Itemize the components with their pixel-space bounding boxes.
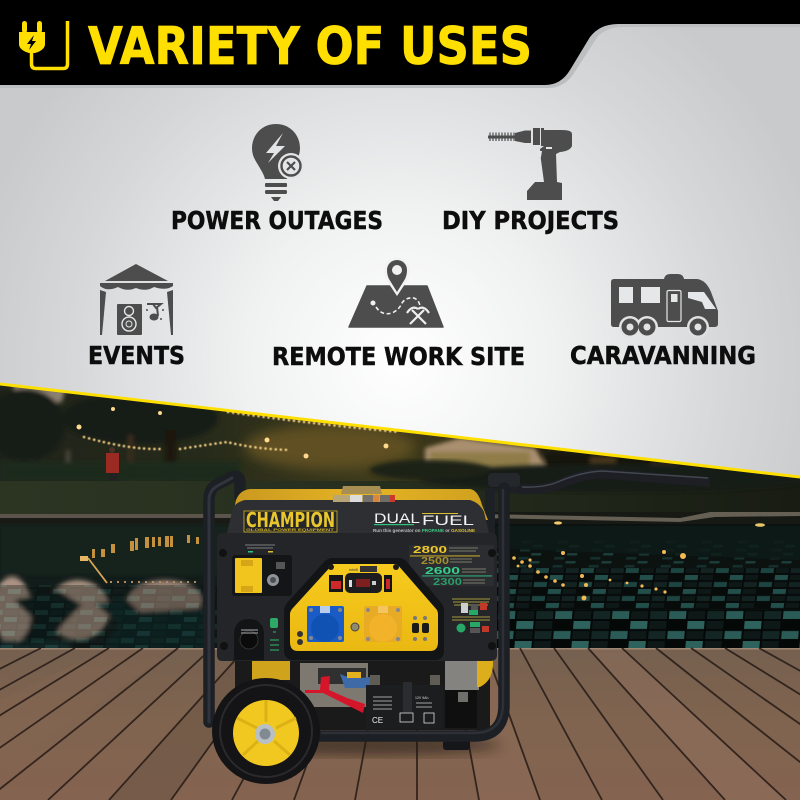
pool water right with tiles [480,521,800,650]
Dual Fuel logo [373,510,475,533]
hood [226,500,490,537]
red tag [305,676,365,713]
fold-out handle [488,471,710,489]
use: DIY projects [442,128,619,235]
output ratings: 2800 [413,545,448,556]
Dual Fuel logo: FUEL [422,512,474,528]
output ratings: 2500 [421,556,450,567]
ground shadow [240,735,500,755]
sticker strip [333,495,395,502]
digital meter [345,573,382,593]
fuel connector [234,618,279,660]
fuel cap [341,486,382,494]
label: POWER OUTAGES [171,206,383,235]
label: CARAVANNING [570,341,756,370]
pool edge [0,512,800,526]
wooden deck [0,648,800,800]
label: EVENTS [88,341,185,370]
battery: CE [372,716,383,725]
person in red [106,453,119,473]
yellow control panel: intelli [349,567,358,572]
wheel [212,678,320,784]
background photo: garden, pool and deck [0,380,800,800]
rocker switch [384,575,392,592]
output ratings [409,545,494,588]
battery: 12V 9Ah [415,696,428,700]
title: VARIETY OF USES [88,17,532,77]
Dual Fuel logo: DUAL [374,510,420,526]
icon: plug with cable [19,21,68,68]
hedge [0,460,800,515]
output ratings: 2600 [425,566,461,577]
panel bolts [219,549,496,650]
output ratings: 2300 [433,577,463,588]
Champion logo: GLOBAL POWER EQUIPMENT [246,528,335,532]
label: REMOTE WORK SITE [272,342,525,371]
rear handle tube [485,488,495,560]
voltage selector and breakers [351,623,359,631]
use: remote work site [272,257,525,371]
icon: map with pin and hammers [349,257,443,327]
Dual Fuel logo: Run this generator on PROPANE or GASOLINE [373,528,475,533]
230V blue socket [307,606,344,642]
use: caravanning [570,274,756,370]
frame tubes [209,476,504,736]
icon: light bulb with lightning [252,124,304,201]
power button [329,575,343,592]
use: events [88,264,185,370]
control panel body [217,533,497,661]
top cover [232,489,488,520]
use: power outages [171,124,383,235]
yellow diagonal divider [0,384,800,477]
header banner [0,0,800,88]
icon: gazebo with speaker and music note [100,264,173,335]
label: DIY PROJECTS [442,206,619,235]
icon: motorhome [611,274,718,338]
switching guide [452,599,490,633]
garden trees with string lights [0,386,800,481]
generator [209,471,710,784]
yellow control panel [284,558,444,660]
start switch panel [232,545,292,596]
110V yellow socket [364,606,402,642]
icon: cordless drill [488,128,572,200]
battery [366,675,443,729]
under-frame engine [235,655,493,750]
Champion logo: CHAMPION [246,508,335,532]
pool water left with sky reflections [0,525,229,648]
